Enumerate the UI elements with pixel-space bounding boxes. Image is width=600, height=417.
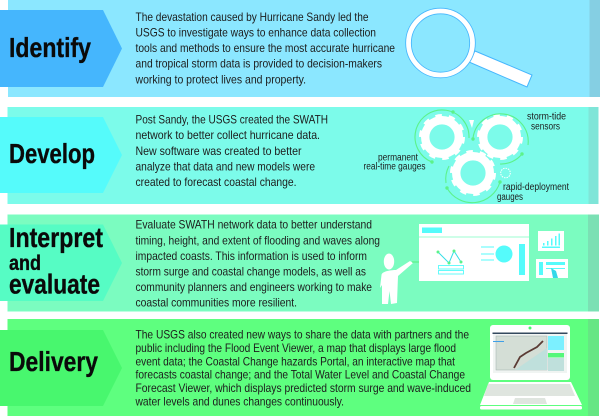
text: interpret: community planners and engineers working to make bbox=[136, 280, 372, 294]
heading: delivery: Delivery bbox=[9, 346, 98, 377]
text: interpret bbox=[136, 218, 380, 310]
panel: develop bbox=[0, 107, 598, 204]
text: interpret: timing, height, and extent of flooding and waves along bbox=[136, 234, 380, 248]
label: permanent real-time gauges: permanent bbox=[378, 152, 418, 164]
text: interpret: Evaluate SWATH network data to better understand bbox=[136, 218, 372, 232]
text: develop: created to forecast coastal change. bbox=[136, 175, 296, 189]
text: identify: tools and methods to ensure the most accurate hurricane bbox=[136, 41, 395, 55]
icon: gears cycle bbox=[415, 110, 528, 203]
text: develop: Post Sandy, the USGS created the SWATH bbox=[136, 112, 328, 126]
arrow: interpret bbox=[0, 224, 122, 301]
heading: interpret and evaluate: evaluate bbox=[9, 268, 100, 300]
text: delivery: event data; the Coastal Change hazards Portal, an interactive map that bbox=[136, 354, 456, 368]
heading: interpret and evaluate: Interpret bbox=[9, 222, 103, 253]
text: identify: working to protect lives and property. bbox=[135, 72, 306, 86]
arrow: delivery bbox=[0, 330, 122, 406]
label: storm-tide sensors bbox=[527, 112, 566, 132]
arrow: identify bbox=[0, 10, 122, 87]
text: identify: and tropical storm data is provided to decision-makers bbox=[136, 56, 382, 70]
panel: interpret and evaluate bbox=[0, 214, 599, 312]
text: identify: USGS to investigate ways to enhance data collection bbox=[136, 26, 376, 40]
icon: laptop with map bbox=[480, 325, 582, 410]
panel: delivery bbox=[0, 319, 599, 416]
text: delivery: forecasts coastal change; and the Total Water Level and Coastal Change bbox=[136, 368, 465, 382]
text: interpret: storm surge and coastal change models, as well as bbox=[136, 264, 366, 278]
text: identify: The devastation caused by Hurricane Sandy led the bbox=[136, 10, 369, 24]
panel: identify bbox=[0, 0, 600, 97]
text: delivery: The USGS also created new ways to share the data with partners and the bbox=[136, 328, 469, 342]
heading: develop: Develop bbox=[9, 138, 95, 169]
label: storm-tide sensors: sensors bbox=[531, 122, 560, 132]
icon: bar chart card bbox=[538, 231, 564, 251]
label: rapid-deployment gauges: gauges bbox=[497, 192, 523, 203]
icon: magnifying glass bbox=[408, 11, 532, 87]
text: identify bbox=[135, 10, 395, 86]
label: permanent real-time gauges bbox=[364, 152, 426, 172]
text: develop: analyze that data and new models were bbox=[136, 160, 315, 174]
heading: interpret and evaluate bbox=[9, 222, 103, 300]
text: interpret: impacted coasts. This information is used to inform bbox=[136, 249, 367, 263]
icon: presenter at board bbox=[380, 224, 529, 304]
text: develop bbox=[136, 112, 328, 189]
heading: identify: Identify bbox=[9, 32, 91, 63]
arrow: develop bbox=[0, 117, 122, 193]
text: delivery: public including the Flood Event Viewer, a map that displays large flood bbox=[136, 341, 456, 355]
label: rapid-deployment gauges bbox=[497, 182, 569, 203]
text: develop: New software was created to better bbox=[136, 144, 302, 158]
text: develop: network to better collect hurricane data. bbox=[136, 128, 320, 142]
label: storm-tide sensors: storm-tide bbox=[527, 112, 566, 122]
label: rapid-deployment gauges: rapid-deployment bbox=[503, 182, 569, 193]
heading: interpret and evaluate: and bbox=[9, 252, 41, 275]
text: delivery: water levels and dunes changes continuously. bbox=[135, 394, 344, 408]
text: delivery bbox=[135, 328, 471, 408]
text: interpret: coastal communities more resilient. bbox=[136, 296, 297, 310]
label: permanent real-time gauges: real-time gauges bbox=[364, 162, 426, 172]
icon: touch card bbox=[536, 259, 568, 278]
text: delivery: Forecast Viewer, which displays predicted storm surge and wave-induced bbox=[136, 381, 471, 395]
